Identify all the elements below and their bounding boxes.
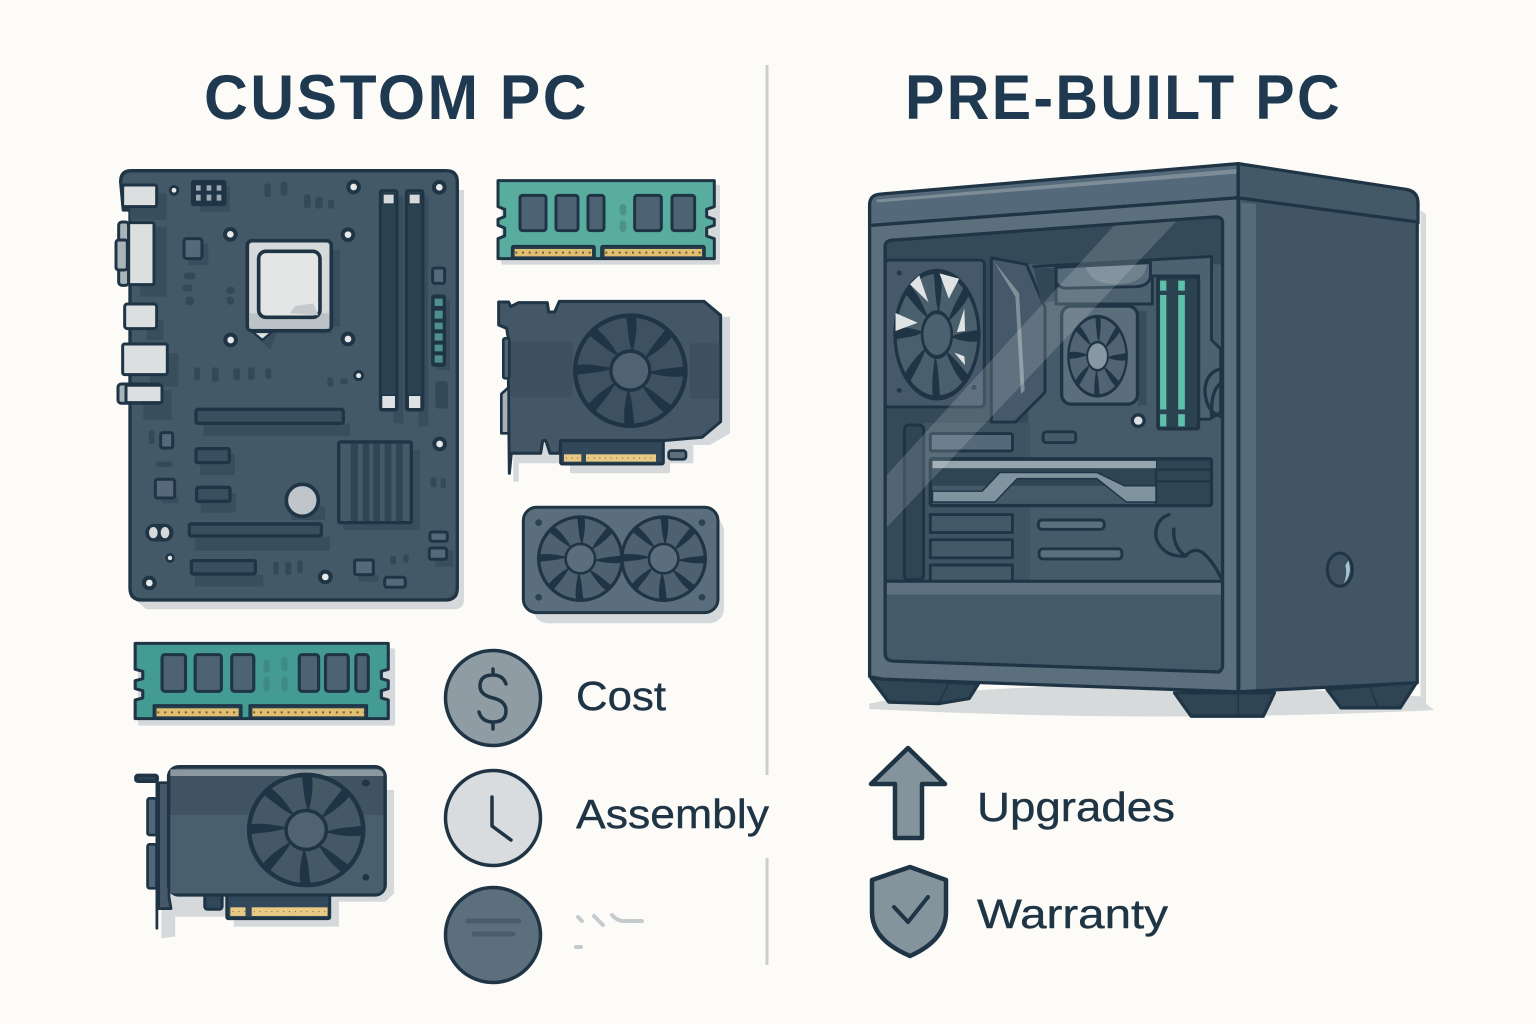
front frame	[870, 198, 1238, 692]
gold contacts	[154, 705, 367, 719]
feet	[871, 678, 1417, 716]
icon: blank coin	[446, 888, 540, 982]
ram stick: bottom	[135, 643, 395, 726]
gold contacts	[512, 246, 705, 259]
icon: upgrades arrow	[871, 748, 945, 838]
expansion slots	[189, 409, 343, 574]
board slots	[1038, 520, 1122, 559]
graphics card	[930, 459, 1212, 506]
window	[882, 214, 1226, 689]
chipset heatsink	[339, 442, 411, 523]
label: warranty: Warranty	[977, 891, 1169, 937]
fan	[242, 768, 370, 892]
title: pre-built pc: PRE-BUILT PC	[905, 63, 1342, 133]
fan	[569, 309, 692, 432]
small fan	[1062, 306, 1138, 404]
drive bays	[930, 515, 1012, 583]
io ports	[116, 185, 167, 403]
cmos battery	[286, 484, 318, 516]
top bracket	[1034, 256, 1221, 419]
pcie connector	[561, 441, 663, 464]
ram slots	[380, 191, 423, 410]
side panel	[1238, 198, 1417, 692]
motherboard	[116, 171, 464, 609]
icon: cost	[446, 650, 540, 746]
cooler tower	[991, 258, 1056, 422]
power button	[1327, 553, 1352, 586]
header and chips	[155, 181, 447, 587]
title: custom pc: CUSTOM PC	[204, 63, 589, 133]
shadows	[130, 187, 453, 587]
memory modules	[1158, 277, 1199, 429]
pcie connector	[227, 893, 330, 919]
ram stick: top	[498, 181, 720, 265]
pre-built case	[869, 164, 1434, 716]
case shadow	[869, 210, 1434, 716]
icon: warranty shield	[872, 867, 946, 956]
icon: clock	[446, 770, 540, 866]
cable	[1156, 515, 1221, 578]
dual fan cooler	[523, 507, 724, 623]
cpu socket	[247, 241, 331, 340]
top panel	[870, 164, 1238, 226]
graphics card: bottom	[136, 767, 394, 938]
glass highlight	[885, 219, 1178, 529]
dim components	[149, 182, 448, 575]
side cable	[1205, 369, 1221, 416]
rear fan	[884, 260, 984, 407]
capacitors	[147, 525, 172, 540]
mounting holes	[142, 180, 447, 590]
label: cost: Cost	[576, 673, 667, 719]
board details	[904, 415, 1144, 580]
smudged label	[576, 915, 642, 947]
label: assembly: Assembly	[576, 791, 770, 837]
graphics card: one fan	[499, 301, 730, 482]
label: upgrades: Upgrades	[977, 784, 1175, 830]
lower shroud	[886, 580, 1221, 670]
